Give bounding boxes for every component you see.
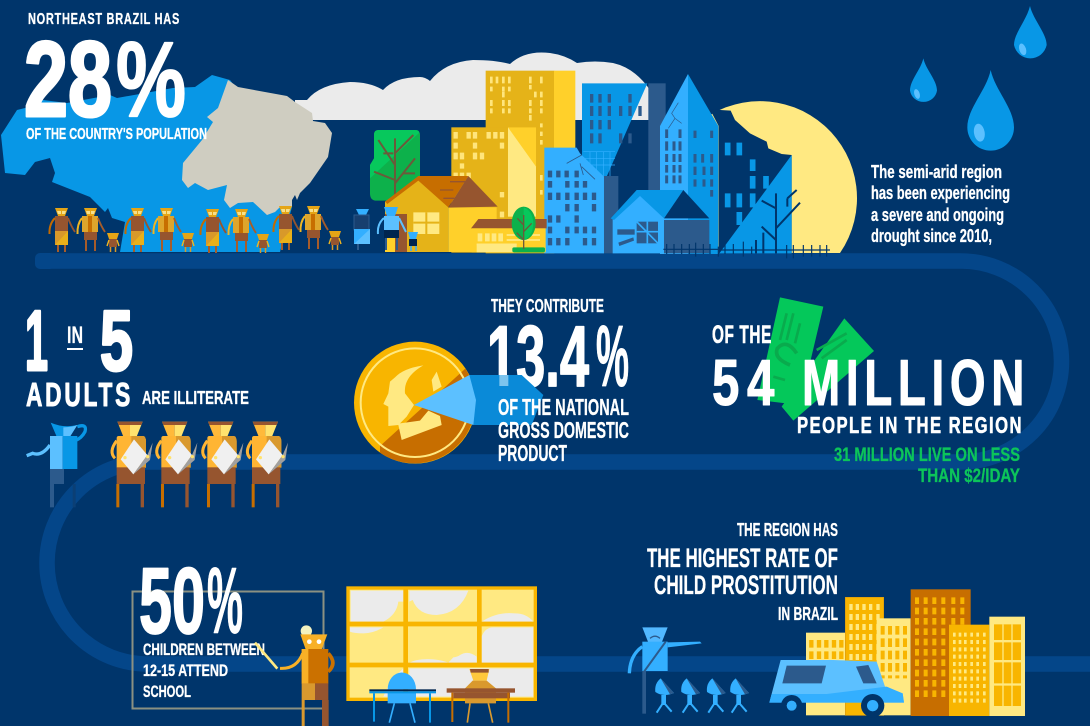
child figure [107,233,119,252]
child figure [681,678,700,713]
stat: 50% children: % [207,548,243,653]
stat: 1 in 5 adults [25,294,249,413]
text: of the national GDP: OF THE NATIONAL [498,394,629,420]
text: highest rate of child prostitution: IN BRAZIL [778,604,838,624]
stat: 50% children: CHILDREN BETWEEN [143,640,265,659]
child figure [730,678,749,713]
text: highest rate of child prostitution: CHILD PROSTITUTION [654,570,838,600]
icon: small tree [512,207,545,252]
stat: 50% children: 12-15 ATTEND [143,661,228,680]
blue woman figure [354,209,370,250]
stat: 1 in 5 adults: 5 [100,294,133,389]
child figure [329,231,341,250]
text: of the national GDP: PRODUCT [498,440,567,466]
stat: 1 in 5 adults: IN [67,322,83,349]
classroom illustration [255,588,535,726]
map: rest of Brazil [1,75,292,252]
icon: top drop [1014,6,1047,58]
text: % [596,309,629,405]
text: semi-arid drought: The semi-arid region [871,162,1002,182]
building [806,633,847,715]
spire tower [660,74,718,254]
icon: small drop [910,58,937,102]
building [877,618,911,715]
reader figure [247,422,288,507]
reader figure [203,422,243,507]
map of Brazil [1,75,332,252]
reader figure [157,422,197,507]
child figure [182,233,194,252]
yellow towers [451,71,575,253]
stat: 50% children: 50 [139,548,205,653]
text: they contribute: THEY CONTRIBUTE [491,295,604,316]
man figure [300,206,328,249]
stat: 1 in 5 adults: 1 [25,294,48,389]
classroom window [348,588,535,699]
teacher [255,625,333,726]
stat: 50% children: SCHOOL [143,682,191,701]
fence [663,242,830,258]
stat: 54 million people: 54 [712,346,782,419]
icon: banknotes [757,297,874,421]
text: highest rate of child prostitution: THE REGION HAS [737,520,838,540]
heading: northeast Brazil has: NORTHEAST BRAZIL HAS [28,11,180,28]
woman figure [200,209,226,253]
ruined dark building [710,109,792,253]
icon: bare tree [756,190,800,253]
man figure [153,208,181,251]
arrow pointer to GDP [414,375,543,425]
blue child figure [408,232,418,251]
text: semi-arid drought: a severe and ongoing [871,205,1004,225]
stat: 54 million people: OF THE [712,321,772,349]
people walking row [49,206,418,253]
map: northeast region [182,80,332,215]
water drops [910,6,1047,151]
woman figure [49,208,75,252]
woman figure [125,208,151,252]
text: 31 million live on less than $2 a day [834,445,1020,487]
cloud [295,52,650,120]
building [911,589,971,716]
child figure [707,678,726,713]
text: of the national GDP: GROSS DOMESTIC [498,417,629,443]
icon: car [769,660,904,717]
child figure [655,678,674,713]
text: semi-arid drought [871,162,1010,246]
blue man figure [378,207,406,250]
building [949,625,989,716]
icon: large tree [370,130,420,201]
big number: 28%: % [116,19,186,139]
icon: gold coin [354,342,476,464]
text: 31 million live on less than $2 a day: 31 MILLION LIVE ON LESS [834,445,1020,466]
cityscape illustration [370,71,830,258]
text: semi-arid drought: drought since 2010, [871,226,992,246]
man figure [77,208,105,251]
moon [663,101,857,253]
child figure [257,234,269,253]
caption: of the country's population: OF THE COUNTRY'S POPULATION [26,126,207,143]
text: of the national GDP [498,394,629,466]
blue house [611,190,709,253]
stat: 54 million people [712,321,1030,438]
stat: 1 in 5 adults: ARE ILLITERATE [142,388,249,408]
chalkboard frame [132,592,324,708]
text: highest rate of child prostitution [647,520,838,624]
orange student at desk [447,669,515,723]
illiterate adults illustration [27,422,288,507]
reader figure [112,422,153,507]
damaged blue block [544,148,618,253]
big number: 28%: 28 [24,19,112,139]
stat: 50% children [139,548,265,701]
low yellow building [471,219,547,252]
icon: large drop [967,70,1014,151]
icon: blue man scratching head [27,423,85,507]
city and car illustration [629,589,1025,717]
yellow house [385,176,498,252]
building [845,597,884,715]
text: 31 million live on less than $2 a day: THAN $2/IDAY [918,466,1020,487]
text: semi-arid drought: has been experiencing [871,183,1010,203]
stat: 1 in 5 adults: ADULTS [26,376,133,413]
man figure [228,209,256,252]
cracked blue tower [582,83,666,193]
icon: pointing man [629,627,702,714]
blue student at desk [369,672,436,723]
winding timeline track [43,261,1090,664]
woman figure [273,206,299,250]
text: highest rate of child prostitution: THE HIGHEST RATE OF [647,543,838,573]
building [989,617,1025,716]
big number: 13.4%: 13.4 [487,309,589,405]
